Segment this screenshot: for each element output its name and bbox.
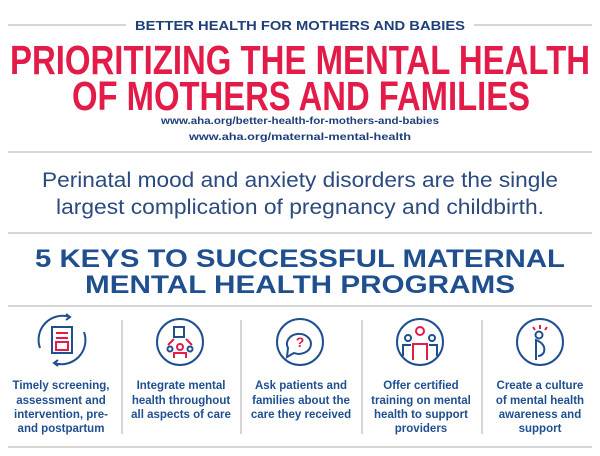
keys heading: 5 KEYS TO SUCCESSFUL MATERNAL [35,245,565,273]
header: BETTER HEALTH FOR MOTHERS AND BABIES [135,18,465,33]
item texts: of mental health [496,395,584,407]
item texts: health to support [374,409,468,421]
subtitle: largest complication of pregnancy and childbirth. [56,196,544,219]
icon: question: ? [296,334,304,350]
icon: culture [517,319,563,365]
keys heading [35,245,565,299]
urls: www.aha.org/better-health-for-mothers-and-babies [160,115,439,127]
item texts: Timely screening, [13,380,109,392]
item texts: assessment and [16,395,106,407]
item texts: Ask patients and [255,380,347,392]
item texts: support [519,423,562,435]
urls: www.aha.org/maternal-mental-health [188,131,411,143]
title [10,37,590,119]
item texts: care they received [251,409,351,421]
item texts: Create a culture [497,380,583,392]
icon: training [397,319,443,365]
item texts: intervention, pre- [14,409,108,421]
item texts: families about the [252,395,350,407]
subtitle [42,169,558,219]
item texts: awareness and [499,409,581,421]
item texts: Offer certified [383,380,459,392]
urls [160,115,439,143]
icon: integrate [157,319,203,365]
item texts: Integrate mental [137,380,225,392]
item texts: health throughout [132,395,230,407]
keys heading: MENTAL HEALTH PROGRAMS [85,271,515,299]
subtitle: Perinatal mood and anxiety disorders are the single [42,169,558,192]
icon: screening [39,314,85,366]
icon: question [277,319,323,365]
item texts: providers [395,423,447,435]
item texts: training on mental [371,395,471,407]
item texts: and postpartum [18,423,104,435]
item texts: all aspects of care [131,409,231,421]
item texts [13,380,584,435]
